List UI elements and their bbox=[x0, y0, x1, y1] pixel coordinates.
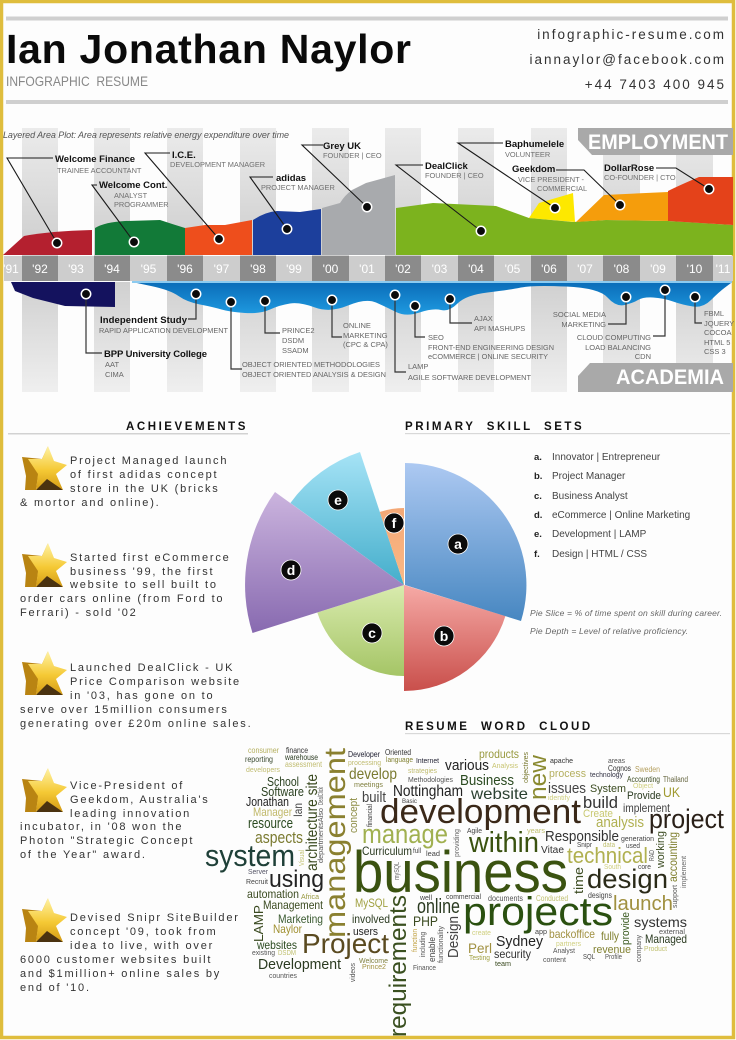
legend: skills: Development | LAMP bbox=[552, 529, 647, 540]
legend: skills: a. bbox=[534, 452, 542, 463]
employment callouts: Welcome Cont. bbox=[99, 180, 167, 191]
word cloud: Server bbox=[248, 867, 268, 876]
employment callouts: PROJECT MANAGER bbox=[261, 183, 335, 192]
academia callouts: PRINCE2 bbox=[282, 326, 315, 335]
year axis: '94 bbox=[104, 262, 120, 276]
caption: layered area plot: Layered Area Plot: Area represents relative energy expenditure over time bbox=[3, 130, 289, 140]
employment callouts: adidas bbox=[276, 173, 306, 184]
word cloud: documents bbox=[488, 894, 523, 903]
word cloud: resource bbox=[248, 815, 293, 832]
banner: employment: EMPLOYMENT bbox=[588, 131, 728, 154]
word cloud: development bbox=[380, 793, 582, 831]
word cloud: new bbox=[525, 754, 552, 800]
word cloud: fully bbox=[601, 929, 619, 943]
year axis: '99 bbox=[286, 262, 302, 276]
achievement 2 bbox=[20, 543, 231, 619]
academia callouts: ONLINE bbox=[343, 321, 371, 330]
legend: skills: Business Analyst bbox=[552, 491, 628, 502]
word cloud: Naylor bbox=[273, 922, 302, 936]
word cloud: UK bbox=[663, 784, 681, 800]
word cloud: partners bbox=[556, 941, 581, 948]
academia callouts: CIMA bbox=[105, 370, 124, 379]
word cloud: system bbox=[205, 838, 295, 873]
word cloud: Sydney bbox=[496, 933, 543, 950]
word cloud: analysis bbox=[596, 814, 644, 831]
achievement 1 bbox=[20, 446, 228, 509]
word cloud: meetings bbox=[354, 780, 383, 789]
word cloud: School bbox=[267, 774, 299, 789]
word cloud: products bbox=[479, 747, 519, 761]
achievement 4: Geekdom, Australia's bbox=[70, 794, 210, 806]
year axis: '00 bbox=[323, 262, 339, 276]
chart: skills pie: e bbox=[334, 492, 342, 508]
word cloud: project bbox=[649, 804, 724, 834]
year axis: '91 bbox=[3, 262, 19, 276]
achievement 4: Vice-President of bbox=[70, 780, 184, 792]
achievement 5: and $1million+ online sales by bbox=[20, 968, 221, 980]
word cloud: including bbox=[420, 932, 427, 957]
word cloud: Oriented bbox=[385, 748, 411, 757]
academia callouts: Independent Study bbox=[100, 315, 188, 326]
word cloud: generation bbox=[621, 836, 654, 843]
legend: skills bbox=[534, 452, 690, 560]
word cloud: Analyst bbox=[553, 946, 576, 955]
word cloud: Finance bbox=[413, 963, 436, 972]
employment callouts bbox=[7, 139, 714, 248]
year axis: '04 bbox=[468, 262, 484, 276]
pie notes: Pie Slice = % of time spent on skill during career. bbox=[530, 608, 722, 618]
word cloud: consumer bbox=[248, 746, 279, 755]
word cloud: lead bbox=[426, 851, 440, 858]
word cloud: objectives bbox=[523, 752, 530, 783]
chart: academia area plot bbox=[11, 281, 732, 315]
legend: skills: d. bbox=[534, 510, 542, 521]
academia callouts: SEO bbox=[428, 333, 444, 342]
word cloud: working bbox=[655, 831, 667, 869]
word cloud: revenue bbox=[593, 944, 631, 956]
word cloud: implement bbox=[681, 856, 688, 888]
icon: star bbox=[22, 543, 67, 587]
year axis: '02 bbox=[395, 262, 411, 276]
achievement 4: incubator, in '08 won the bbox=[20, 821, 183, 833]
academia callouts: FRONT-END ENGINEERING DESIGN bbox=[428, 343, 554, 352]
word cloud: existing bbox=[252, 950, 275, 957]
achievement 5: end of '10. bbox=[20, 982, 91, 994]
achievement 3: Launched DealClick - UK bbox=[70, 662, 234, 674]
word cloud: built bbox=[362, 789, 387, 806]
word cloud: Management bbox=[263, 898, 324, 912]
word cloud: Jonathan bbox=[246, 794, 289, 809]
word cloud: process bbox=[549, 768, 586, 780]
word cloud: Responsible bbox=[545, 828, 619, 845]
word cloud: RAD bbox=[649, 850, 656, 861]
word cloud: core bbox=[638, 864, 651, 871]
word cloud: design bbox=[587, 864, 668, 894]
word cloud: Snipr bbox=[577, 842, 593, 849]
academia callouts: OBJECT ORIENTED METHODOLOGIES bbox=[242, 360, 380, 369]
year axis: '96 bbox=[177, 262, 193, 276]
word cloud: processing bbox=[348, 758, 381, 767]
contact details: infographic-resume.com bbox=[537, 27, 726, 42]
legend: skills: Project Manager bbox=[552, 471, 626, 482]
academia callouts: CSS 3 bbox=[704, 347, 726, 356]
employment callouts: Welcome Finance bbox=[55, 154, 135, 165]
word cloud: implement bbox=[623, 801, 671, 815]
word cloud: manage bbox=[362, 819, 448, 849]
word cloud: within bbox=[468, 827, 539, 859]
achievement 1: & mortor and online). bbox=[20, 497, 161, 509]
word cloud: SQL bbox=[583, 952, 595, 961]
academia callouts: LAMP bbox=[408, 362, 428, 371]
achievement 5: Devised Snipr SiteBuilder bbox=[70, 912, 240, 924]
word cloud: Recruit bbox=[246, 877, 269, 886]
word cloud: Analysis bbox=[492, 761, 518, 770]
word cloud: Basic bbox=[402, 798, 418, 805]
academia callouts: CLOUD COMPUTING bbox=[577, 333, 651, 342]
year axis bbox=[3, 256, 733, 281]
word cloud: Marketing bbox=[278, 912, 323, 926]
word cloud: provide bbox=[620, 912, 632, 945]
word cloud: Sweden bbox=[635, 765, 660, 774]
word cloud: build bbox=[583, 793, 618, 812]
year axis: '98 bbox=[250, 262, 266, 276]
year axis: '11 bbox=[716, 262, 731, 276]
achievement 5 bbox=[20, 898, 240, 994]
word cloud: various bbox=[445, 757, 489, 774]
word cloud: Visual bbox=[299, 850, 306, 866]
employment callouts: DollarRose bbox=[604, 163, 654, 174]
icon: star bbox=[22, 651, 67, 695]
word cloud: online bbox=[417, 896, 460, 918]
achievement 1: Project Managed launch bbox=[70, 455, 228, 467]
academia callouts: COCOA bbox=[704, 328, 732, 337]
word cloud: Curriculum bbox=[362, 844, 412, 858]
legend: skills: f. bbox=[534, 549, 540, 560]
heading: resume word cloud: RESUME WORD CLOUD bbox=[405, 721, 593, 733]
employment callouts: VOLUNTEER bbox=[505, 150, 550, 159]
word cloud: departmentsAlso bbox=[318, 808, 325, 863]
academia callouts: RAPID APPLICATION DEVELOPMENT bbox=[99, 326, 228, 335]
year axis: '97 bbox=[214, 262, 230, 276]
word cloud: warehouse bbox=[284, 753, 318, 762]
year axis: '09 bbox=[650, 262, 666, 276]
word cloud: Conducted bbox=[536, 894, 568, 903]
achievement 5: concept '09, took from bbox=[70, 926, 217, 938]
year axis: '93 bbox=[68, 262, 84, 276]
academia callouts: DSDM bbox=[282, 336, 304, 345]
word cloud: create bbox=[472, 930, 491, 937]
title: Ian Jonathan Naylor bbox=[6, 26, 411, 72]
word cloud: financial bbox=[367, 804, 374, 827]
word cloud: concept bbox=[348, 798, 360, 833]
word cloud: data bbox=[603, 842, 615, 849]
academia callouts: HTML 5 bbox=[704, 338, 730, 347]
word cloud: issues bbox=[548, 780, 586, 797]
achievement 2: business '99, the first bbox=[70, 566, 214, 578]
word cloud: time bbox=[571, 867, 586, 894]
word cloud: providing bbox=[454, 829, 461, 857]
legend: skills: Innovator | Entrepreneur bbox=[552, 452, 661, 463]
chart: skills pie: b bbox=[440, 628, 448, 644]
word cloud: using bbox=[269, 866, 324, 893]
employment callouts: Grey UK bbox=[323, 141, 361, 152]
word cloud: Provide bbox=[627, 790, 661, 802]
word cloud: language bbox=[386, 755, 413, 764]
employment callouts: I.C.E. bbox=[172, 150, 196, 161]
achievement 4: leading innovation bbox=[70, 808, 191, 820]
word cloud: function bbox=[412, 929, 419, 952]
achievement 3: Price Comparison website bbox=[70, 676, 241, 688]
word cloud: reporting bbox=[245, 755, 273, 764]
icon: star bbox=[22, 898, 67, 942]
word cloud: Accounting bbox=[627, 775, 660, 784]
word cloud: LAMP bbox=[251, 905, 266, 942]
employment callouts: PROGRAMMER bbox=[114, 200, 169, 209]
word cloud: Testing bbox=[469, 955, 490, 962]
word cloud: management bbox=[319, 747, 352, 938]
achievement 2: website to sell built to bbox=[69, 579, 218, 591]
word cloud: Manager bbox=[253, 805, 292, 819]
word cloud: strategies bbox=[408, 766, 437, 775]
word cloud: backoffice bbox=[549, 927, 595, 941]
employment callouts: TRAINEE ACCOUNTANT bbox=[57, 166, 142, 175]
word cloud: Vitae bbox=[541, 845, 564, 856]
word cloud: app bbox=[535, 929, 547, 936]
word cloud: assessment bbox=[285, 760, 323, 769]
academia callouts: AGILE SOFTWARE DEVELOPMENT bbox=[408, 373, 531, 382]
word cloud: technology bbox=[590, 770, 623, 779]
word cloud: Project bbox=[302, 928, 389, 959]
word cloud: years bbox=[527, 828, 546, 835]
word cloud: mySQL bbox=[394, 862, 401, 880]
employment callouts: DEVELOPMENT MANAGER bbox=[170, 160, 265, 169]
word cloud: designs bbox=[588, 891, 612, 900]
academia callouts: SOCIAL MEDIA bbox=[553, 310, 606, 319]
word cloud: Cognos bbox=[608, 764, 631, 773]
year axis: '07 bbox=[577, 262, 593, 276]
word cloud: Africa bbox=[301, 894, 319, 901]
word cloud: areas bbox=[608, 758, 625, 765]
icon: star bbox=[22, 768, 67, 812]
word cloud: Methodologies bbox=[408, 775, 453, 784]
word cloud: identify bbox=[548, 795, 570, 802]
academia callouts: AJAX bbox=[474, 314, 493, 323]
heading: achievements: ACHIEVEMENTS bbox=[126, 421, 248, 433]
word cloud: Developer bbox=[348, 750, 380, 759]
academia callouts bbox=[81, 285, 734, 382]
achievement 3 bbox=[20, 651, 252, 730]
word cloud: aspects bbox=[255, 828, 303, 847]
academia callouts: MARKETING bbox=[561, 320, 606, 329]
employment callouts: Geekdom bbox=[512, 164, 555, 175]
achievement 1: store in the UK (bricks bbox=[70, 483, 220, 495]
pie notes: Pie Depth = Level of relative proficiency. bbox=[530, 626, 688, 636]
word cloud: Business bbox=[460, 772, 514, 789]
word cloud: finance bbox=[286, 746, 308, 755]
word cloud: enable bbox=[427, 937, 437, 962]
contact details bbox=[529, 27, 726, 92]
word cloud: apache bbox=[550, 756, 573, 765]
achievement 1: of first adidas concept bbox=[70, 469, 218, 481]
year axis: '10 bbox=[687, 262, 703, 276]
word cloud: commercial bbox=[446, 894, 481, 901]
academia callouts: (CPC & CPA) bbox=[343, 340, 388, 349]
word cloud: functionality bbox=[438, 926, 445, 963]
employment callouts: FOUNDER | CEO bbox=[323, 151, 382, 160]
chart: skills pie bbox=[245, 452, 526, 691]
academia callouts: CDN bbox=[635, 352, 651, 361]
chart: skills pie: c bbox=[368, 625, 376, 641]
word cloud: Design bbox=[445, 916, 462, 958]
word cloud: full bbox=[413, 848, 421, 855]
timeline column stripes bbox=[22, 128, 713, 392]
word cloud: projects bbox=[463, 890, 613, 934]
word cloud: security bbox=[494, 947, 531, 961]
word cloud: Nottingham bbox=[393, 783, 463, 800]
employment callouts: Baphumelele bbox=[505, 139, 564, 150]
employment callouts: ANALYST bbox=[114, 191, 148, 200]
word cloud bbox=[205, 746, 724, 1037]
academia callouts: BPP University College bbox=[104, 349, 207, 360]
academia callouts: MARKETING bbox=[343, 331, 388, 340]
word cloud: Managed bbox=[645, 932, 687, 946]
word cloud: MySQL bbox=[355, 896, 388, 910]
banner: academia: ACADEMIA bbox=[616, 366, 724, 389]
academia callouts: JQUERY bbox=[704, 319, 734, 328]
academia callouts: FBML bbox=[704, 309, 724, 318]
achievement 4: Photon "Strategic Concept bbox=[20, 835, 194, 847]
word cloud: automation bbox=[247, 887, 299, 901]
contact details: +44 7403 400 945 bbox=[585, 77, 726, 92]
word cloud: videos bbox=[350, 963, 357, 982]
year axis: '08 bbox=[614, 262, 630, 276]
word cloud: content bbox=[543, 955, 567, 964]
word cloud: Profile bbox=[605, 954, 622, 961]
word cloud: website bbox=[470, 786, 528, 803]
year axis: '05 bbox=[505, 262, 521, 276]
chart: skills pie: a bbox=[454, 536, 462, 552]
word cloud: Create bbox=[583, 808, 613, 820]
achievement 2: order cars online (from Ford to bbox=[20, 593, 224, 605]
word cloud: support bbox=[672, 885, 679, 908]
word cloud: accounting bbox=[666, 832, 680, 882]
year axis: '03 bbox=[432, 262, 448, 276]
year axis: '06 bbox=[541, 262, 557, 276]
word cloud: develop bbox=[349, 766, 397, 783]
year axis: '92 bbox=[32, 262, 48, 276]
employment callouts: FOUNDER | CEO bbox=[425, 171, 484, 180]
heading: primary skill sets: PRIMARY SKILL SETS bbox=[405, 421, 584, 433]
subtitle: INFOGRAPHIC RESUME bbox=[6, 73, 148, 89]
achievement 4 bbox=[20, 768, 210, 861]
word cloud: Agile bbox=[467, 828, 482, 835]
word cloud: users bbox=[353, 926, 378, 938]
academia callouts: AAT bbox=[105, 360, 119, 369]
chart: skills pie: d bbox=[287, 562, 295, 578]
word cloud: architecture site bbox=[304, 774, 321, 871]
word cloud: DSDM bbox=[278, 950, 296, 957]
year axis: '95 bbox=[141, 262, 157, 276]
academia callouts: eCOMMERCE | ONLINE SECURITY bbox=[428, 352, 548, 361]
achievement 2: Started first eCommerce bbox=[70, 552, 231, 564]
word cloud: Object bbox=[633, 781, 654, 790]
legend: skills: c. bbox=[534, 491, 542, 502]
icon: star bbox=[22, 446, 67, 490]
word cloud: Prince2 bbox=[362, 962, 386, 971]
word cloud: countries bbox=[269, 973, 297, 980]
word cloud: Internet bbox=[416, 756, 440, 765]
year axis: '01 bbox=[359, 262, 375, 276]
word cloud: company bbox=[636, 935, 643, 962]
word cloud: DealClick bbox=[318, 787, 325, 805]
legend: skills: e. bbox=[534, 529, 542, 540]
legend: skills: eCommerce | Online Marketing bbox=[552, 510, 690, 521]
chart: employment area plot bbox=[3, 175, 733, 255]
achievement 3: serve over 15million consumers bbox=[20, 704, 229, 716]
word cloud: launch bbox=[613, 893, 673, 915]
word cloud: developers bbox=[246, 765, 280, 774]
employment callouts: COMMERCIAL bbox=[537, 184, 587, 193]
word cloud: websites bbox=[256, 938, 297, 952]
word cloud: System bbox=[590, 783, 626, 795]
legend: skills: b. bbox=[534, 471, 542, 482]
employment callouts: VICE PRESIDENT - bbox=[518, 175, 585, 184]
word cloud: PHP bbox=[413, 913, 438, 929]
academia callouts: OBJECT ORIENTED ANALYSIS & DESIGN bbox=[242, 370, 386, 379]
word cloud: technical bbox=[567, 843, 648, 868]
word cloud: South bbox=[604, 864, 621, 871]
word cloud: Ian bbox=[291, 803, 305, 817]
legend: skills: Design | HTML / CSS bbox=[552, 549, 647, 560]
word cloud: requirements bbox=[385, 895, 412, 1037]
pie notes bbox=[530, 608, 722, 636]
academia callouts: API MASHUPS bbox=[474, 324, 525, 333]
word cloud: involved bbox=[352, 912, 390, 926]
word cloud: well bbox=[419, 895, 432, 902]
achievement 4: of the Year" award. bbox=[20, 849, 147, 861]
word cloud: external bbox=[659, 927, 685, 936]
word cloud: Product bbox=[644, 944, 668, 953]
achievement 3: generating over £20m online sales. bbox=[20, 718, 252, 730]
achievement 3: in '03, has gone on to bbox=[70, 690, 214, 702]
word cloud: business bbox=[353, 840, 568, 905]
word cloud: Development bbox=[258, 956, 342, 973]
word cloud: Welcome bbox=[359, 956, 388, 965]
achievement 5: idea to live, with over bbox=[70, 940, 214, 952]
contact details: iannaylor@facebook.com bbox=[529, 52, 726, 67]
word cloud: used bbox=[626, 843, 640, 850]
achievement 2: Ferrari) - sold '02 bbox=[20, 607, 138, 619]
word cloud: Thailand bbox=[663, 775, 688, 784]
word cloud: team bbox=[495, 959, 511, 968]
chart: skills pie: f bbox=[392, 515, 397, 531]
academia callouts: LOAD BALANCING bbox=[585, 343, 651, 352]
word cloud: Perl bbox=[468, 940, 492, 956]
banner: academia bbox=[578, 363, 733, 392]
word cloud: systems bbox=[634, 914, 687, 930]
word cloud: Software bbox=[261, 784, 304, 799]
employment callouts: CO-FOUNDER | CTO bbox=[604, 173, 676, 182]
achievement 5: 6000 customer websites built bbox=[20, 954, 212, 966]
employment callouts: DealClick bbox=[425, 161, 468, 172]
header bbox=[6, 16, 728, 104]
academia callouts: SSADM bbox=[282, 346, 309, 355]
